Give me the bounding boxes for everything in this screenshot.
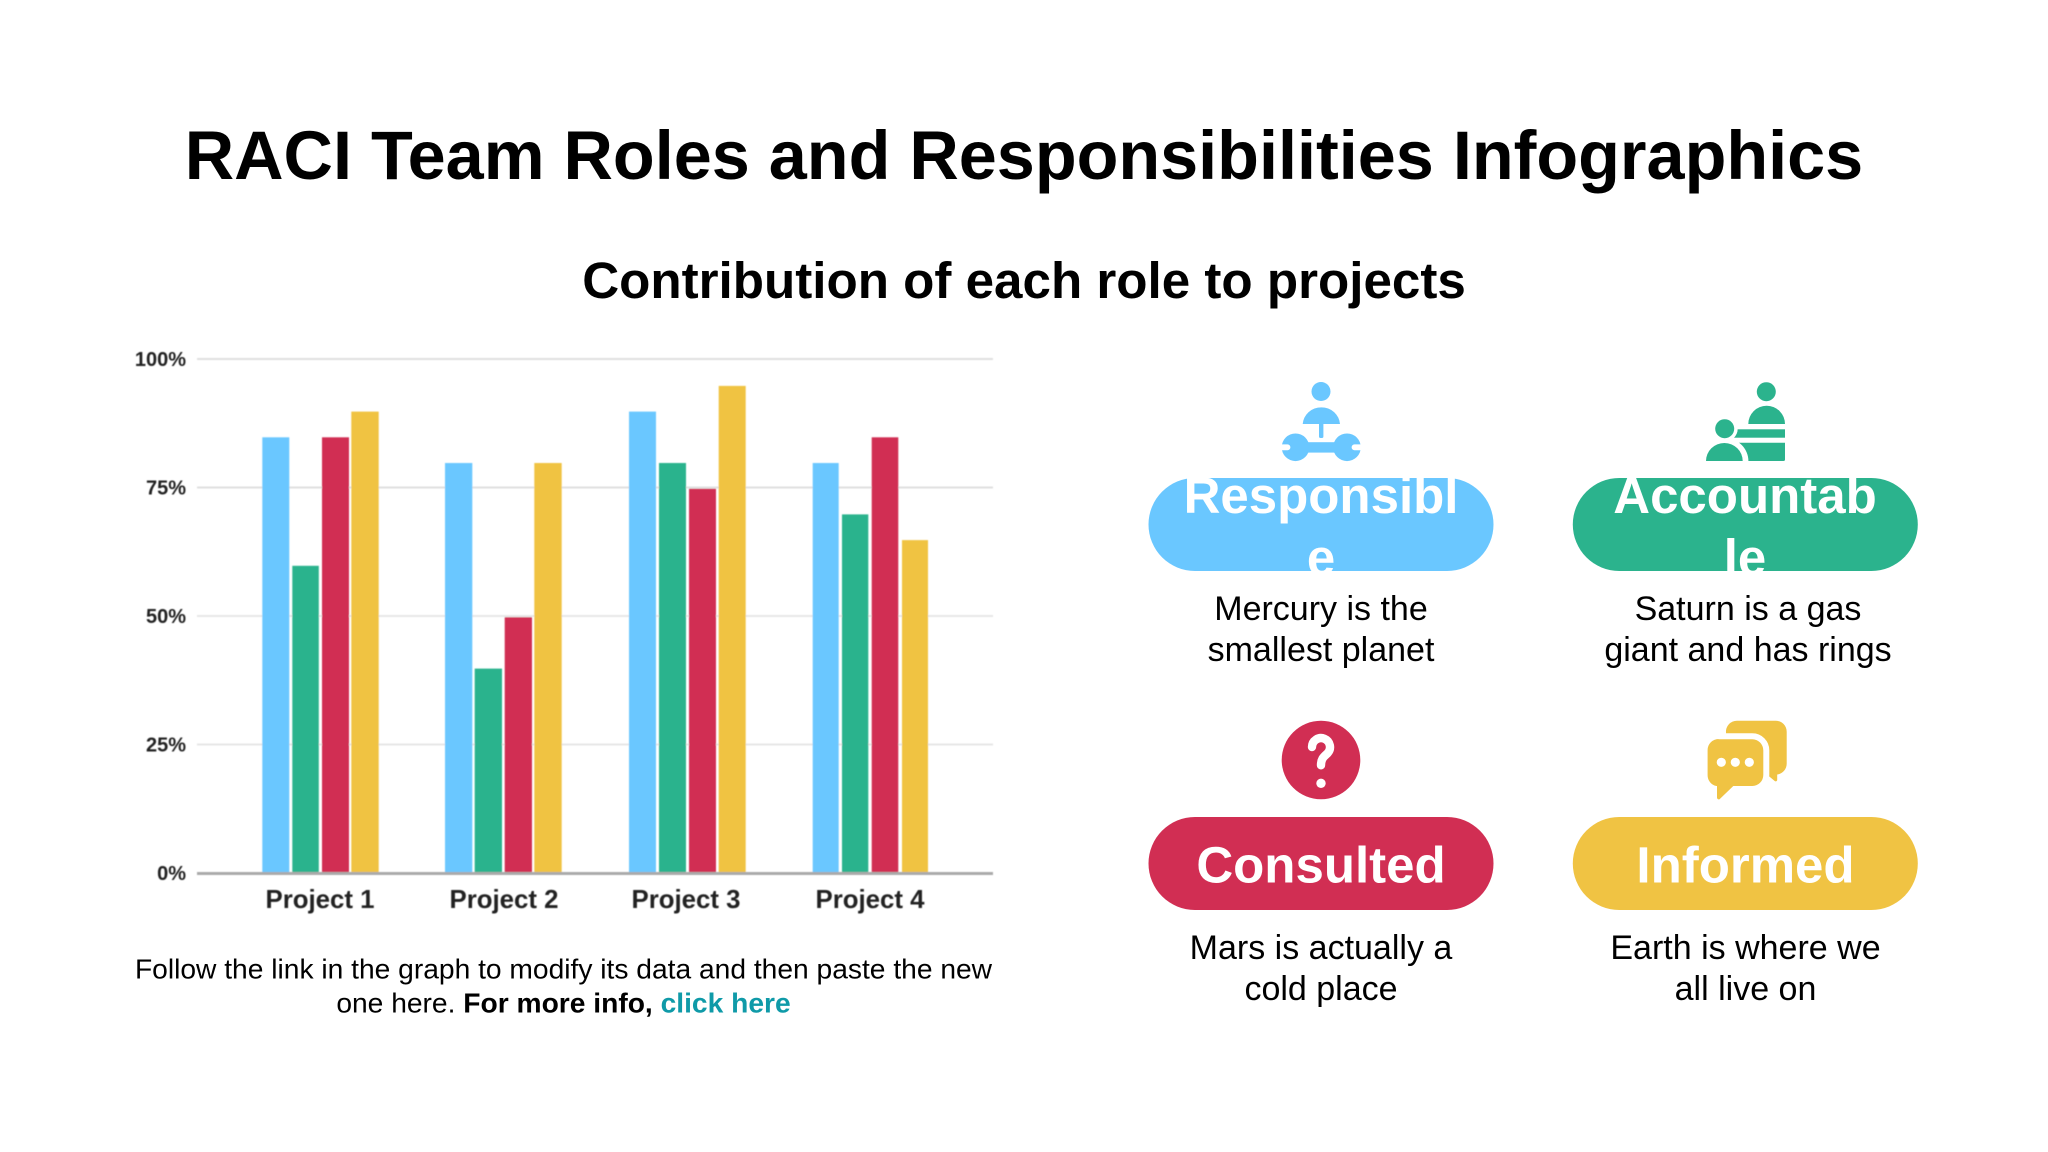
subtitle: Contribution of each role to projects <box>582 252 1466 309</box>
description: Earth: Earth is where we <box>1610 929 1881 967</box>
icon: question mark <box>1282 721 1360 799</box>
bars: Project 1 <box>262 412 379 873</box>
pill: Responsible <box>1148 478 1494 571</box>
icon: person with wrench <box>1278 382 1364 461</box>
title: RACI Team Roles and Responsibilities Infographics <box>185 118 1863 194</box>
card: Informed <box>1573 721 1918 1008</box>
description: Mercury: smallest planet <box>1208 631 1435 669</box>
x axis labels <box>266 886 925 914</box>
pill label: Responsible: Responsibl <box>1184 467 1458 524</box>
x axis labels: Project 1 <box>266 886 374 914</box>
x axis labels: Project 4 <box>816 886 925 914</box>
y axis labels <box>135 349 186 885</box>
y axis labels: 75% <box>146 478 186 500</box>
pill: Accountable <box>1573 478 1918 571</box>
icon: chat bubbles <box>1707 721 1787 799</box>
chart note: For more info, click here <box>463 986 791 1018</box>
card: Consulted <box>1148 721 1494 1008</box>
y axis labels: 25% <box>146 734 186 756</box>
y axis labels: 0% <box>157 863 186 885</box>
y axis labels: 100% <box>135 349 186 371</box>
pill label: Accountable: Accountab <box>1613 467 1877 524</box>
bars: Project 4 <box>813 437 928 873</box>
bar chart <box>135 349 993 914</box>
pill label: Responsible: e <box>1307 529 1335 586</box>
card: Accountable <box>1573 382 1918 669</box>
chart note: one here. <box>336 986 463 1018</box>
pill label: Informed: Informed <box>1636 836 1855 894</box>
description: Mercury: Mercury is the <box>1214 590 1428 628</box>
card: Responsible <box>1148 382 1494 669</box>
bars: Project 3 <box>629 386 746 873</box>
bars: Project 2 <box>445 463 562 873</box>
description: Earth: all live on <box>1675 970 1816 1008</box>
description: Saturn: Saturn is a gas <box>1635 590 1861 628</box>
description: Saturn: giant and has rings <box>1604 631 1892 669</box>
x axis labels: Project 2 <box>450 886 558 914</box>
y axis labels: 50% <box>146 606 186 628</box>
description: Mars: Mars is actually a <box>1190 929 1452 967</box>
description: Mars: cold place <box>1244 970 1398 1008</box>
icon: people at desk <box>1701 382 1785 466</box>
chart note: Follow the link in the graph to modify its data and then paste the new <box>135 952 992 984</box>
pill: Informed <box>1573 817 1918 910</box>
pill label: Consulted: Consulted <box>1196 836 1446 894</box>
pill label: Accountable: le <box>1724 529 1766 586</box>
pill: Consulted <box>1148 817 1494 910</box>
x axis labels: Project 3 <box>632 886 740 914</box>
